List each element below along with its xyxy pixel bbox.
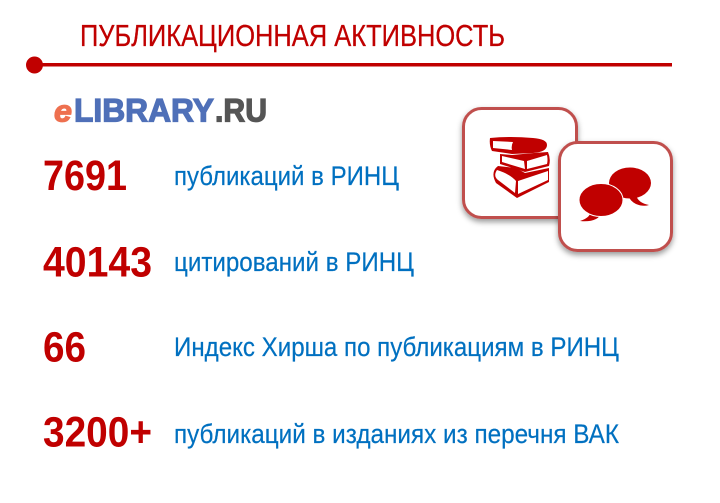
stat: 66 h-index — [43, 324, 619, 372]
logo: eLIBRARY.RU: .RU — [215, 92, 267, 128]
logo: eLIBRARY.RU: LIBRARY — [74, 92, 214, 128]
logo: eLIBRARY.RU: e — [54, 94, 72, 128]
title rule with dot — [26, 56, 672, 74]
stat: 66 h-index: 66 — [43, 324, 86, 372]
stat: 66 h-index: Индекс Хирша по публикациям в РИНЦ — [174, 332, 619, 362]
icon: stacked books — [490, 137, 550, 198]
stat: 40143 citations: 40143 — [43, 238, 152, 286]
stat: 40143 citations — [43, 238, 414, 286]
stat: 7691 publications: 7691 — [43, 152, 127, 200]
logo: eLIBRARY.RU — [54, 92, 267, 128]
icon: speech bubbles — [579, 168, 651, 221]
stat: 7691 publications — [43, 152, 399, 200]
icon card: speech bubbles — [560, 142, 672, 250]
stat: 3200+ VAK publications: публикаций в изданиях из перечня ВАК — [174, 419, 619, 449]
icon card: books — [464, 108, 576, 218]
stat: 3200+ VAK publications: 3200+ — [43, 408, 152, 456]
stat: 3200+ VAK publications — [43, 408, 619, 456]
title: ПУБЛИКАЦИОННАЯ АКТИВНОСТЬ — [80, 18, 505, 53]
stat: 40143 citations: цитирований в РИНЦ — [174, 247, 414, 277]
stat: 7691 publications: публикаций в РИНЦ — [174, 161, 399, 191]
